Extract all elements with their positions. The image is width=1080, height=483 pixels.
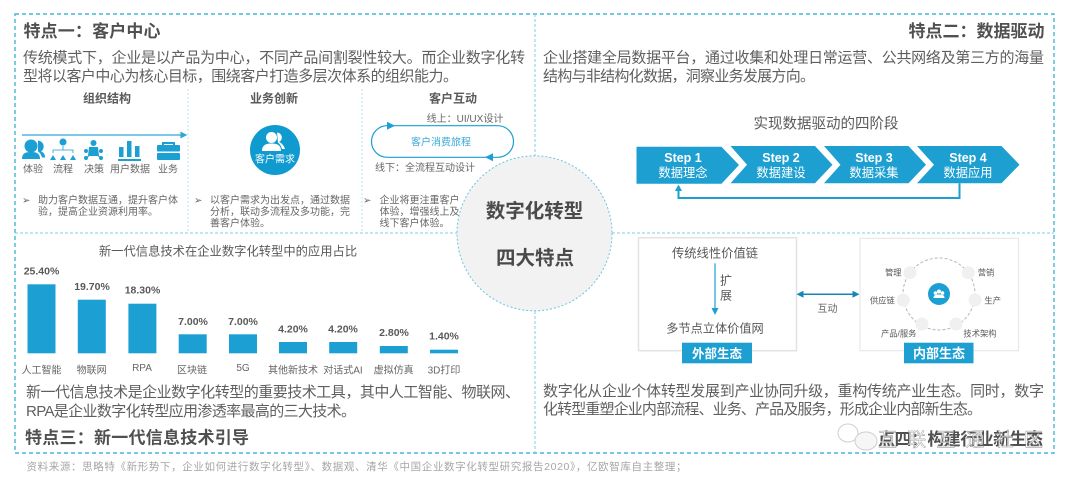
chevron: step 2: Step 2 xyxy=(762,151,800,165)
icon: customer demand circle xyxy=(250,125,300,175)
icon: user data bars xyxy=(118,141,141,161)
sub-panel: customer interaction: 客户互动 xyxy=(429,90,477,106)
sub-panel: organisation structure: 组织结构 xyxy=(83,90,131,106)
bar chart: 2.80% xyxy=(379,327,410,339)
icon: decision person xyxy=(84,140,103,160)
chevron: step 3 xyxy=(824,146,926,183)
internal ecosystem box: 供应链 xyxy=(870,296,895,306)
bullet text: 企业将更注重客户 xyxy=(380,194,460,206)
icons: five organisation functions xyxy=(22,138,180,161)
chevron: step 4: 数据应用 xyxy=(943,165,993,180)
chart title: 新一代信息技术在企业数字化转型中的应用占比 xyxy=(99,244,357,258)
diagram: customer journey loop xyxy=(372,122,514,161)
chevron: step 3: 数据采集 xyxy=(849,165,899,180)
heading: feature three: 特点三：新一代信息技术引导 xyxy=(25,428,249,448)
bar chart: 5G xyxy=(236,363,250,374)
text block: feature three description xyxy=(26,383,520,420)
arrow: expansion xyxy=(712,263,718,315)
icon: business briefcase xyxy=(157,142,180,160)
external ecosystem box: 扩 xyxy=(720,274,732,288)
bar chart: 其他新技术 xyxy=(268,364,318,376)
bullet text: ➢ xyxy=(194,196,202,206)
internal ecosystem box: 产品/服务 xyxy=(881,328,916,338)
bullet text: 线下客户体验。 xyxy=(380,216,450,230)
text block: feature one description: 型将以客户中心为核心目标，围绕客户打造多层次体系的组织能力。 xyxy=(23,68,458,85)
external ecosystem box: 外部生态 xyxy=(692,346,742,361)
text block: feature one description xyxy=(23,48,525,85)
central circle: four features: 四大特点 xyxy=(496,248,574,270)
text block: feature one description: 传统模式下，企业是以产品为中心，不同产品间割裂性较大。而企业数字化转 xyxy=(23,48,525,66)
source note: 资料来源：思略特《新形势下，企业如何进行数字化转型》、数据观、清华《中国企业数字化转型研究报告2020》，亿欧智库自主整理； xyxy=(26,460,686,473)
text block: feature four description xyxy=(543,382,1044,418)
chevron: step 4 xyxy=(917,146,1020,183)
bullet text: ➢ xyxy=(363,196,371,206)
chevron: step 1: Step 1 xyxy=(664,151,702,165)
bar chart: 人工智能 xyxy=(22,364,62,376)
bullet text: 善客户体验。 xyxy=(210,216,270,230)
heading: feature one: 特点一：客户中心 xyxy=(24,21,160,41)
chevron: step 2: 数据建设 xyxy=(756,165,806,180)
bar chart: 区块链 xyxy=(177,364,207,376)
icon labels: 流程 xyxy=(53,162,73,176)
icon labels: 用户数据 xyxy=(110,162,150,176)
icon labels xyxy=(23,162,178,176)
bar chart: 4.20% xyxy=(278,323,309,335)
icon: customer demand circle: 客户需求 xyxy=(255,152,295,166)
internal ecosystem box: 管理 xyxy=(885,268,902,278)
bar chart: 3D打印 xyxy=(428,364,460,376)
text block: feature two description: 结构与非结构化数据，洞察业务发展方向。 xyxy=(543,67,815,85)
bullet text xyxy=(363,194,460,230)
bar chart xyxy=(22,265,460,376)
bar chart: 18.30% xyxy=(125,285,161,297)
bullet text: ➢ xyxy=(22,196,30,206)
chevron: step 1 xyxy=(636,147,739,184)
external ecosystem box: 展 xyxy=(720,288,732,302)
chevron: step 4: Step 4 xyxy=(949,151,987,165)
bar chart: 7.00% xyxy=(178,316,209,328)
panel: feature four, ecosystem xyxy=(543,238,1044,451)
bar chart: 虚拟仿真 xyxy=(374,364,414,376)
heading: feature four with watermark overlay: 点四：构建行业新生态 xyxy=(878,429,1043,449)
internal ecosystem box: 营销 xyxy=(978,268,994,278)
text block: feature four description: 化转型重塑企业内部流程、业务、产品及服务，形成企业内部新生态。 xyxy=(543,400,982,418)
sub-panel: business innovation: 业务创新 xyxy=(250,90,298,106)
arrow: interaction: 互动 xyxy=(818,303,838,315)
text block: feature two description xyxy=(543,48,1044,85)
bar chart: 对话式AI xyxy=(323,364,363,376)
internal ecosystem box: 技术架构 xyxy=(963,328,997,338)
icon labels: 体验 xyxy=(23,162,43,176)
panel: feature one, customer centre xyxy=(22,21,525,230)
bar chart: 7.00% xyxy=(228,316,259,328)
central circle: four features xyxy=(457,156,612,311)
chevron: step 1: 数据理念 xyxy=(658,165,708,180)
text block: feature four description: 数字化从企业个体转型发展到产业协同升级，重构传统产业生态。同时，数字 xyxy=(543,382,1044,400)
heading: feature two: 特点二：数据驱动 xyxy=(908,22,1044,41)
diagram: customer journey loop: 客户消费旅程 xyxy=(411,135,471,148)
bullet text: 体验，增强线上及 xyxy=(380,205,460,218)
icon: chat bubbles watermark xyxy=(838,424,877,450)
external ecosystem box: 多节点立体价值网 xyxy=(666,320,764,336)
arrow: organisation timeline xyxy=(22,132,186,138)
internal ecosystem box xyxy=(860,238,1018,363)
text block: feature three description: RPA是企业数字化转型应用渗透率最高的三大技术。 xyxy=(26,402,356,420)
icon labels: 业务 xyxy=(158,162,178,176)
central circle: four features: 数字化转型 xyxy=(486,200,583,222)
bullet text xyxy=(194,194,350,230)
heading: feature four with watermark overlay: 互联互通社区 xyxy=(878,429,1043,451)
sub-panel: customer interaction xyxy=(363,90,514,230)
bullet text: 以客户需求为出发点，通过数据 xyxy=(210,194,350,206)
bullet text xyxy=(22,194,178,218)
chevron: step 2 xyxy=(730,146,832,183)
internal ecosystem box: 生产 xyxy=(984,296,1001,306)
bar chart: 25.40% xyxy=(24,265,60,277)
bar chart: 1.40% xyxy=(429,331,460,343)
sub-panel: organisation structure xyxy=(22,90,186,218)
bullet text: 分析，联动多流程及多功能，完 xyxy=(210,205,350,218)
text block: feature two description: 企业搭建全局数据平台，通过收集和处理日常运营、公共网络及第三方的海量 xyxy=(543,48,1044,66)
external ecosystem box xyxy=(638,238,796,363)
arrow: interaction xyxy=(796,291,860,315)
icon: experience people xyxy=(22,140,45,159)
heading: four stages: 实现数据驱动的四阶段 xyxy=(754,116,898,132)
bullet text: 助力客户数据互通，提升客户体 xyxy=(38,194,178,206)
arrow: feedback loop xyxy=(675,183,960,198)
icon: central team xyxy=(928,283,950,305)
panel: feature three, new technology xyxy=(22,244,520,448)
sub-panel: customer interaction: 线上：UI/UX设计 xyxy=(427,112,503,125)
bar chart: 19.70% xyxy=(74,281,110,293)
bullet text: 验，提高企业资源利用率。 xyxy=(38,205,158,218)
bar chart: 4.20% xyxy=(328,323,359,335)
text block: feature three description: 新一代信息技术是企业数字化转型的重要技术工具，其中人工智能、物联网、 xyxy=(26,383,520,401)
bar chart: RPA xyxy=(132,363,152,374)
internal ecosystem box: 内部生态 xyxy=(913,346,965,361)
icon: process tree xyxy=(50,138,76,160)
sub-panel: business innovation xyxy=(194,90,350,230)
external ecosystem box: 传统线性价值链 xyxy=(672,246,758,260)
panel: feature two, data driven xyxy=(543,22,1044,198)
bar chart: 物联网 xyxy=(77,364,107,376)
sub-panel: customer interaction: 线下：全流程互动设计 xyxy=(375,161,475,174)
icon labels: 决策 xyxy=(84,162,104,176)
chevron: step 3: Step 3 xyxy=(855,151,893,165)
